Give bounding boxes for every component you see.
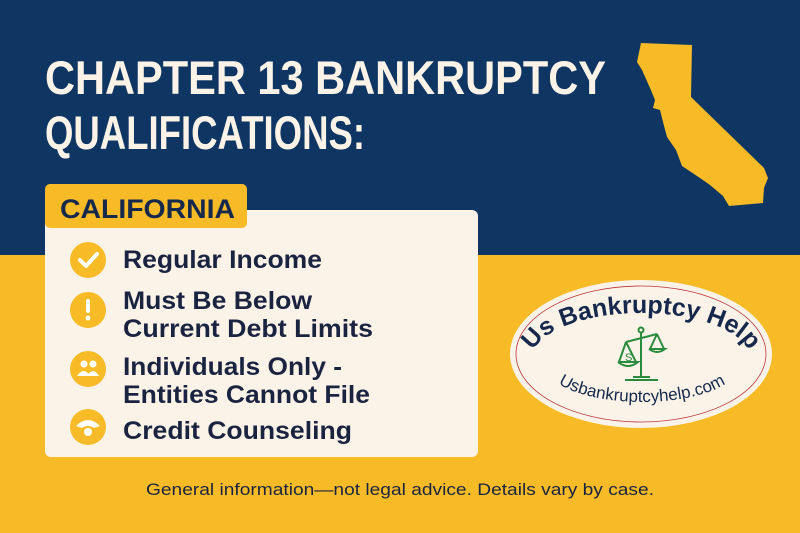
footer disclaimer: General information—not legal advice. Details vary by case.	[146, 480, 654, 499]
item: regular income	[70, 242, 322, 278]
item: debt limits: Current Debt Limits	[123, 315, 373, 343]
label tag: california	[45, 184, 247, 228]
logo badge	[510, 280, 772, 428]
item: debt limits: Must Be Below	[123, 287, 313, 315]
item: credit counseling: Credit Counseling	[123, 417, 352, 445]
item: regular income: Regular Income	[123, 246, 322, 274]
icon: scales: S	[625, 352, 632, 364]
icon: california map	[637, 43, 768, 206]
title: QUALIFICATIONS:	[45, 106, 365, 159]
item: individuals only: Entities Cannot File	[123, 381, 370, 409]
title	[45, 51, 606, 159]
logo url: Usbankruptcyhelp.com	[560, 374, 725, 406]
panel: qualifications	[45, 184, 478, 457]
item: individuals only	[70, 351, 370, 409]
title: CHAPTER 13 BANKRUPTCY	[45, 51, 606, 104]
item: credit counseling	[70, 409, 352, 445]
icon: scales	[618, 328, 665, 380]
item: debt limits	[70, 287, 373, 343]
label tag: california: CALIFORNIA	[60, 194, 235, 224]
logo title: Us Bankruptcy Help	[520, 296, 758, 348]
item: individuals only: Individuals Only -	[123, 353, 342, 381]
